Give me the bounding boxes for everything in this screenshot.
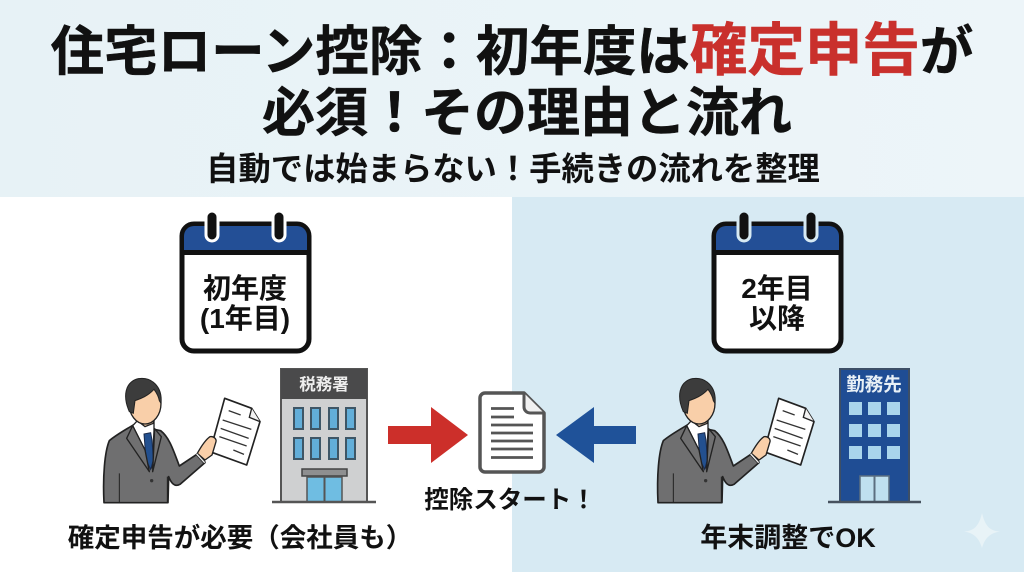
icon: person holding document (left)	[104, 378, 260, 503]
title: 住宅ローン控除：初年度は確定申告が	[51, 19, 973, 83]
icon: calendar first year	[182, 211, 309, 351]
icon: workplace building: 勤務先	[846, 374, 902, 395]
icon: calendar second year: 2年目	[741, 273, 813, 304]
icon: tax office building: 税務署	[299, 375, 349, 394]
icon: workplace building	[828, 369, 921, 502]
subtitle: 自動では始まらない！手続きの流れを整理	[206, 151, 820, 187]
label: year-end adjustment: 年末調整でOK	[700, 523, 876, 553]
icon: person holding document (right)	[658, 378, 814, 503]
arrow: blue pointing left	[556, 407, 636, 463]
arrow: red pointing right	[388, 407, 468, 463]
icon: calendar second year: 以降	[749, 303, 805, 334]
icon: calendar first year: (1年目)	[200, 303, 290, 334]
icon: sparkle	[964, 513, 1000, 548]
panel: first year (white)	[0, 197, 512, 572]
title: 必須！その理由と流れ	[262, 84, 792, 143]
icon: document	[480, 393, 544, 472]
label: tax return required: 確定申告が必要（会社員も）	[68, 523, 412, 553]
label: start of deduction: 控除スタート！	[424, 486, 596, 514]
panel: second year onward (light blue)	[512, 197, 1024, 572]
icon: calendar first year: 初年度	[203, 273, 287, 304]
title	[51, 19, 973, 143]
panel: header band	[0, 0, 1024, 197]
icon: calendar second year	[714, 211, 841, 351]
icon: tax office building	[272, 369, 376, 502]
